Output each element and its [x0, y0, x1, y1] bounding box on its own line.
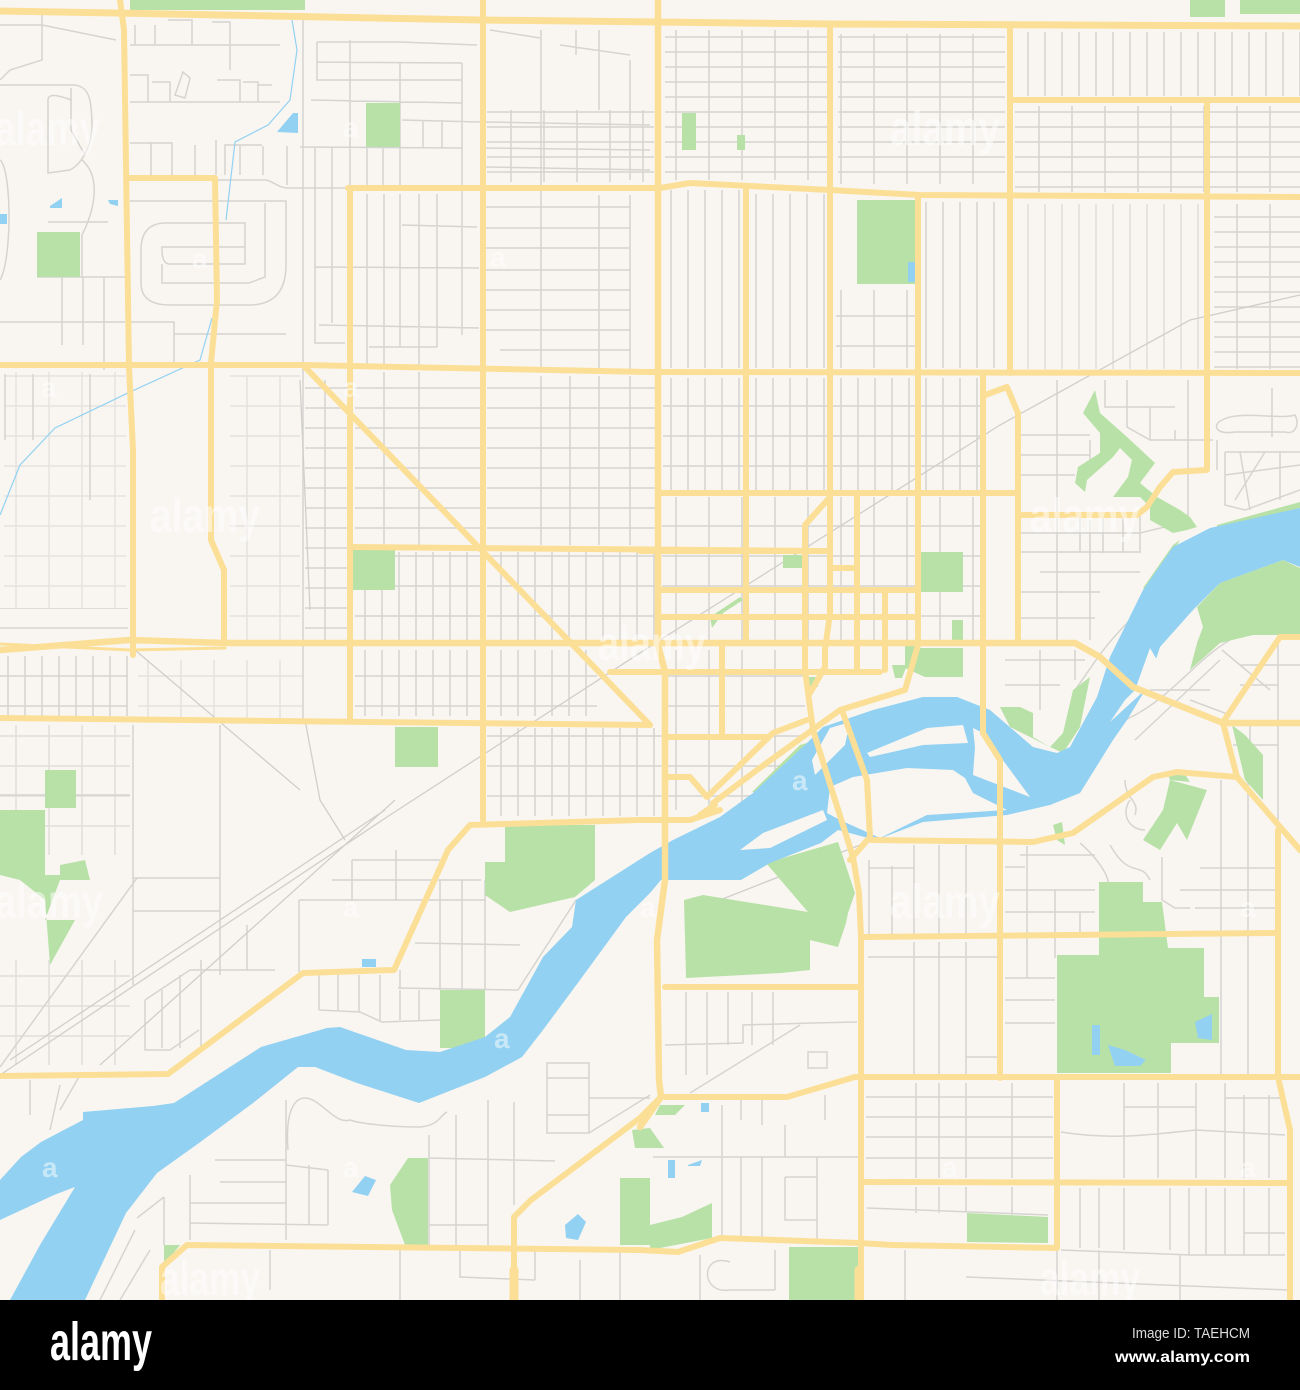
watermarks: [0, 103, 1140, 1306]
diagonal avenue: [303, 365, 650, 725]
railway lines: [0, 295, 1300, 1075]
watermark glyphs: a: [792, 765, 808, 796]
park: south east: [1057, 882, 1219, 1073]
park: golf course: [1075, 390, 1197, 533]
watermark glyphs: a: [41, 372, 57, 403]
river: [0, 508, 1300, 1300]
watermark glyphs: a: [343, 1152, 359, 1183]
watermarks: alamy: [890, 103, 1000, 156]
watermark glyphs: [41, 112, 1256, 1183]
watermarks: alamy: [160, 1253, 260, 1306]
watermark glyphs: a: [343, 112, 359, 143]
watermarks: alamy: [1040, 1253, 1140, 1306]
streets: north west: [0, 15, 650, 720]
footer bar: [0, 1300, 1300, 1390]
watermarks: alamy: [598, 618, 706, 671]
streets: east: [1005, 380, 1300, 855]
watermark glyphs: a: [42, 1152, 58, 1183]
watermarks: alamy: [150, 490, 260, 543]
park: riverside large: [684, 842, 855, 978]
streets: south centre: [580, 780, 1288, 1300]
watermark glyphs: a: [494, 1023, 510, 1054]
image id: Image ID: TAEHCM: [1132, 1326, 1250, 1342]
watermark glyphs: a: [490, 242, 506, 273]
east-west roads: [0, 11, 1300, 26]
watermark glyphs: a: [1240, 1152, 1256, 1183]
watermark glyphs: a: [343, 892, 359, 923]
footer logo: alamy: [50, 1312, 152, 1372]
river islands: [740, 648, 1160, 850]
north-south roads: [120, 0, 133, 655]
watermark glyphs: a: [343, 372, 359, 403]
watermark glyphs: a: [942, 1152, 958, 1183]
watermark glyphs: a: [192, 243, 208, 274]
website: www.alamy.com: [1114, 1349, 1250, 1366]
river roads: [0, 820, 640, 1076]
watermark glyphs: a: [640, 892, 656, 923]
watermarks: alamy: [890, 876, 1000, 929]
park: top edge: [130, 0, 305, 10]
streets: south west: [0, 725, 650, 1300]
watermarks: alamy: [1030, 490, 1140, 543]
watermark glyphs: a: [1240, 892, 1256, 923]
